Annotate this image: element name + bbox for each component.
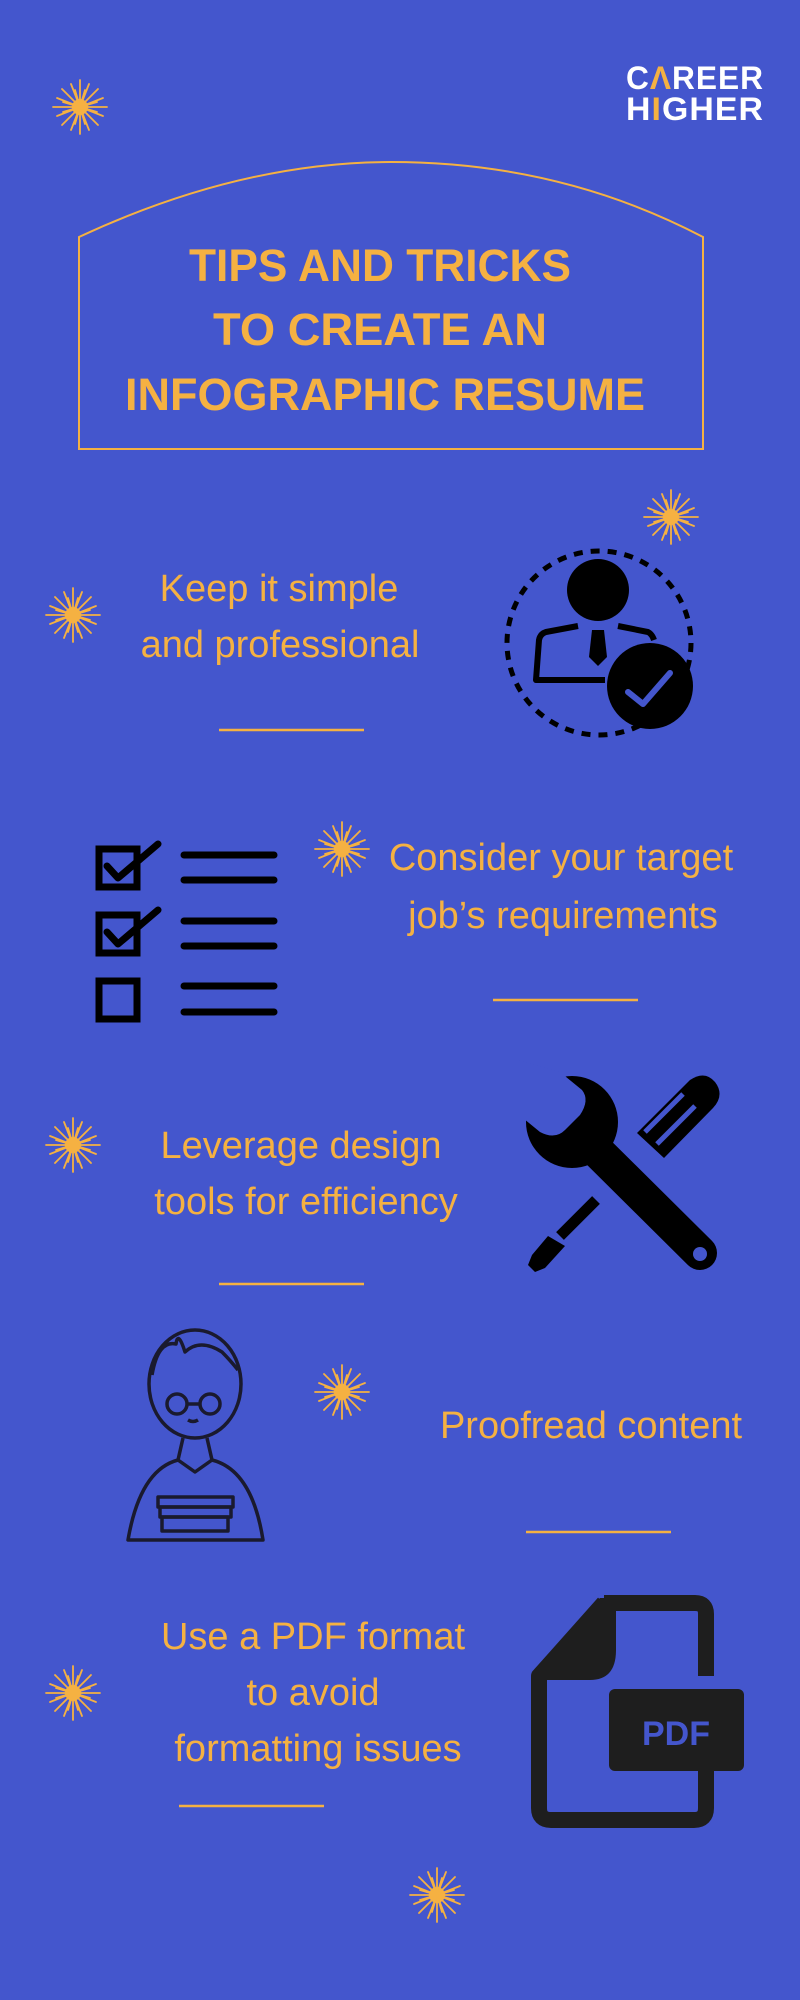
tip 5 text: Use a PDF format [161, 1616, 465, 1658]
star [46, 1666, 100, 1720]
tip 2 text [389, 837, 734, 937]
tip 1 text: Keep it simple [160, 568, 398, 610]
divider 5 [179, 1805, 324, 1807]
star [315, 822, 369, 876]
tip 3 text [154, 1125, 458, 1223]
title panel [79, 162, 703, 449]
divider 1 [219, 729, 364, 731]
tip 1 text [141, 568, 419, 666]
tip 1 text: and professional [141, 624, 419, 666]
star [46, 1118, 100, 1172]
icon: checklist [99, 844, 274, 1019]
icon: PDF file: PDF [642, 1715, 710, 1753]
tip 3 text: Leverage design [160, 1125, 442, 1167]
logo [626, 60, 764, 127]
tip 5 text: to avoid [246, 1672, 380, 1714]
tip 3 text: tools for efficiency [154, 1181, 458, 1223]
star [315, 1365, 369, 1419]
logo: CΛREER [626, 60, 764, 96]
title: TO CREATE AN [213, 304, 547, 355]
icon: professional person with check [507, 551, 693, 735]
title: TIPS AND TRICKS [189, 240, 571, 291]
divider 2 [493, 999, 638, 1001]
tip 5 text [161, 1616, 465, 1770]
logo: HIGHER [626, 91, 764, 127]
icon: PDF file [532, 1598, 744, 1820]
tip 2 text: job’s requirements [407, 895, 718, 937]
tip 4 text: Proofread content [440, 1405, 742, 1447]
icon: person reading [128, 1330, 263, 1540]
tip 2 text: Consider your target [389, 837, 734, 879]
tip 5 text: formatting issues [174, 1728, 462, 1770]
star: bottom [410, 1868, 464, 1922]
title [125, 240, 645, 420]
divider 3 [219, 1283, 364, 1285]
star [644, 490, 698, 544]
icon: tools [518, 1060, 720, 1272]
divider 4 [526, 1531, 671, 1533]
star: top left [53, 80, 107, 134]
star [46, 588, 100, 642]
title: INFOGRAPHIC RESUME [125, 369, 645, 420]
